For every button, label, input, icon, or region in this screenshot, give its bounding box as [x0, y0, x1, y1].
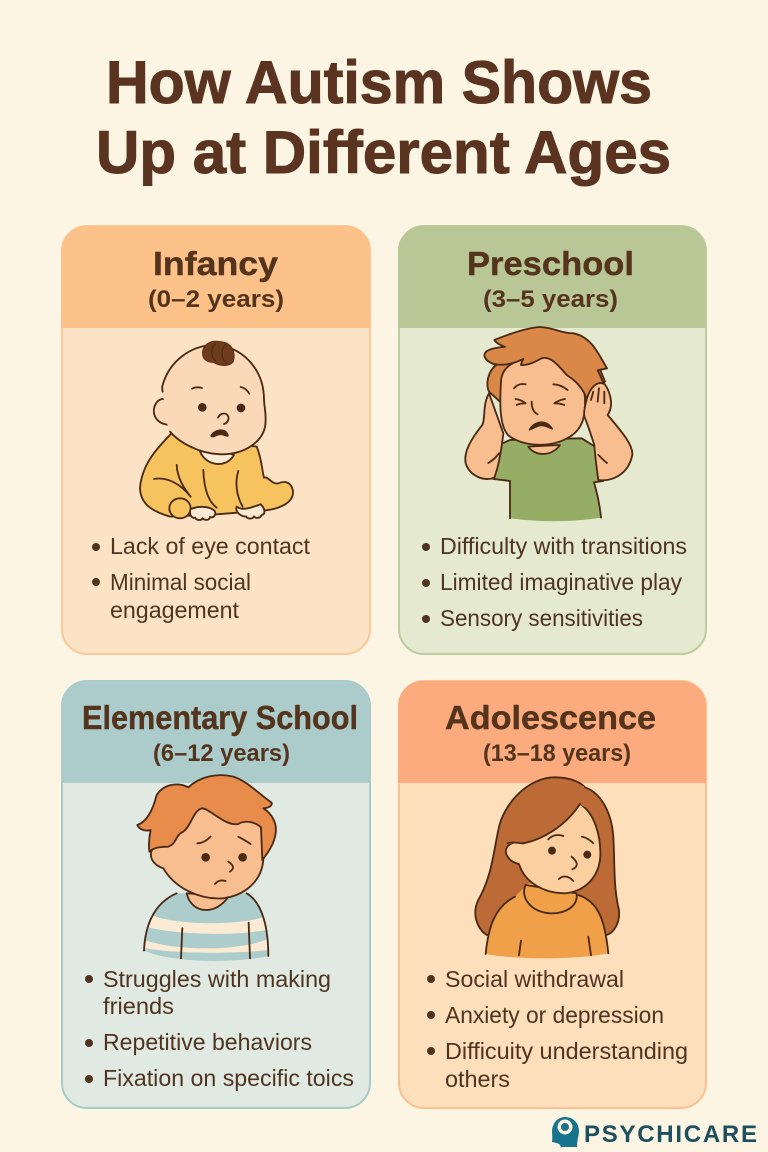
panel header: preschool: Preschool: [467, 245, 634, 282]
panel header: infancy: (0–2 years): [148, 286, 284, 313]
bullet list: infancy: [92, 533, 311, 623]
bullet list: preschool: Difficulty with transitions: [440, 533, 687, 559]
bullet list: elementary school: Fixation on specific toics: [103, 1065, 354, 1091]
bullet list: adolescence: Difficuity understanding: [445, 1038, 688, 1064]
bullet list: infancy: engagement: [110, 597, 240, 623]
panel header: adolescence: (13–18 years): [483, 740, 631, 767]
panel header: infancy: Infancy: [153, 245, 279, 282]
panel header: adolescence: Adolescence: [445, 699, 656, 736]
bullet list: adolescence: Anxiety or depression: [445, 1002, 664, 1028]
bullet list: preschool: Limited imaginative play: [440, 569, 682, 595]
bullet list: elementary school: Struggles with making: [103, 966, 331, 992]
bullet list: elementary school: friends: [103, 993, 174, 1019]
panel: elementary school: [61, 681, 370, 1108]
panel header: infancy: [61, 226, 370, 328]
icon: sad boy in striped sweater: [137, 775, 276, 961]
panel: adolescence: [398, 681, 706, 1108]
title: Up at Different Ages: [96, 119, 671, 186]
title: [96, 49, 671, 186]
bullet list: preschool: [422, 533, 687, 631]
logo: psychicare: PSYCHICARE: [584, 1121, 757, 1148]
bullet list: adolescence: others: [445, 1066, 510, 1092]
icon: head with magnifier: [552, 1117, 579, 1147]
panel header: preschool: (3–5 years): [483, 286, 618, 313]
title: How Autism Shows: [106, 49, 652, 116]
panel header: elementary school: (6–12 years): [153, 740, 290, 767]
panel header: elementary school: Elementary School: [82, 699, 358, 736]
bullet list: infancy: Lack of eye contact: [110, 533, 311, 559]
panel: infancy: [61, 226, 370, 654]
panel: preschool: [398, 226, 706, 654]
icon: crawling baby: [140, 341, 293, 520]
bullet list: elementary school: [85, 966, 354, 1091]
panel header: elementary school: [61, 681, 370, 783]
panel header: preschool: [398, 226, 706, 328]
icon: child covering ears: [465, 327, 632, 521]
bullet list: infancy: Minimal social: [110, 569, 251, 595]
panel header: adolescence: [398, 681, 706, 783]
bullet list: preschool: Sensory sensitivities: [440, 605, 643, 631]
icon: sad teenage girl: [475, 777, 619, 958]
bullet list: elementary school: Repetitive behaviors: [103, 1029, 312, 1055]
bullet list: adolescence: Social withdrawal: [445, 966, 624, 992]
bullet list: adolescence: [427, 966, 688, 1092]
